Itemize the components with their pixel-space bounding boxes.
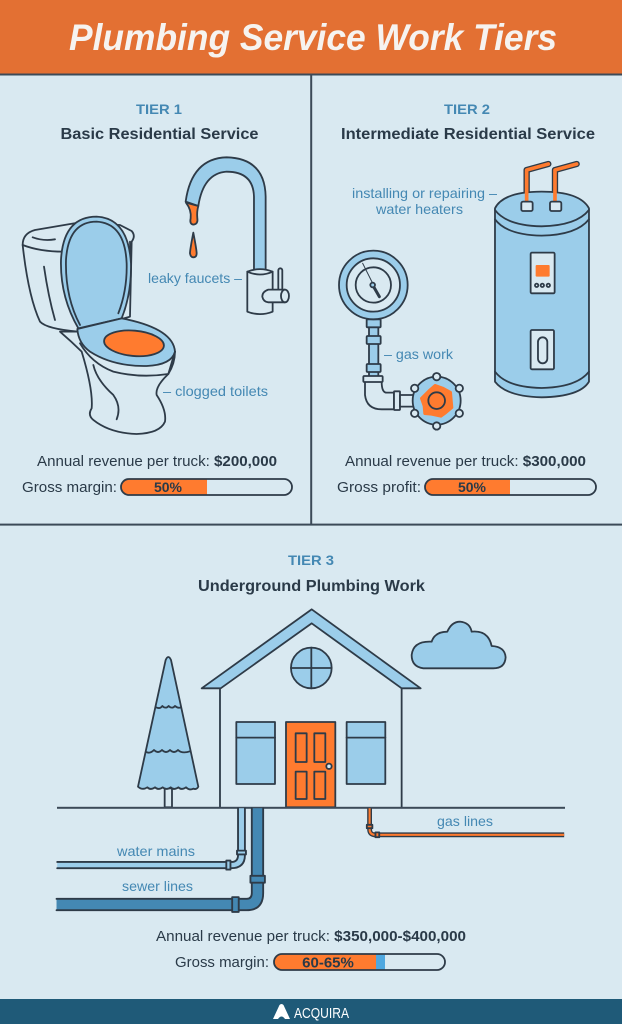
callout: water heaters: installing or repairing – xyxy=(352,185,497,201)
icon: leaky faucet xyxy=(186,157,289,314)
panel: tier 1 xyxy=(22,101,292,496)
gas pipe xyxy=(367,808,564,837)
gross profit label: Gross profit: xyxy=(337,479,421,496)
progress bar 50% xyxy=(121,479,292,495)
illustration: house xyxy=(202,609,421,807)
illustration: underground pipes xyxy=(57,808,564,912)
progress bar 50%: 50% xyxy=(458,479,487,495)
gross margin label: Gross margin: xyxy=(22,479,117,496)
callout: water heaters xyxy=(352,185,497,217)
logo mark xyxy=(273,1004,290,1019)
tier 1 heading: Basic Residential Service xyxy=(60,126,259,143)
footer bar xyxy=(0,999,622,1024)
callout: gas lines: gas lines xyxy=(437,813,493,829)
illustration: cloud xyxy=(412,622,506,668)
water main pipe xyxy=(57,808,246,870)
illustration: tree xyxy=(138,657,198,807)
title: Plumbing Service Work Tiers xyxy=(69,17,557,58)
tier 2 heading: Intermediate Residential Service xyxy=(341,126,595,143)
progress bar 50% xyxy=(425,479,596,495)
progress bar 60-65% xyxy=(274,954,445,972)
sewer pipe xyxy=(57,808,265,912)
tier 2 label: TIER 2 xyxy=(444,101,490,117)
brand name: ACQUIRA xyxy=(294,1005,349,1022)
callout: leaky faucets: leaky faucets – xyxy=(148,270,242,286)
callout: clogged toilets: – clogged toilets xyxy=(163,383,268,399)
tier 1 label: TIER 1 xyxy=(136,101,182,117)
callout: sewer lines: sewer lines xyxy=(122,878,193,894)
callout: gas work: – gas work xyxy=(384,346,454,362)
icon: gas gauge and valve xyxy=(339,251,463,430)
tier 3 label: TIER 3 xyxy=(288,552,334,568)
revenue stat: Annual revenue per truck: $350,000-$400,000 xyxy=(156,928,466,945)
revenue stat: Annual revenue per truck: $200,000 xyxy=(37,453,277,470)
progress bar 50%: 50% xyxy=(154,479,183,495)
tier 3 heading: Underground Plumbing Work xyxy=(198,578,425,595)
gross margin label: Gross margin: xyxy=(175,954,269,971)
revenue stat: Annual revenue per truck: $300,000 xyxy=(345,453,586,470)
callout: water heaters: water heaters xyxy=(375,201,463,217)
icon: water heater xyxy=(495,164,589,397)
panel: tier 2 xyxy=(337,101,596,496)
header banner xyxy=(0,0,622,76)
panel: tier 3 xyxy=(57,552,565,972)
progress bar 60-65%: 60-65% xyxy=(302,954,354,972)
callout: water mains: water mains xyxy=(116,843,195,859)
icon: toilet xyxy=(23,217,175,434)
